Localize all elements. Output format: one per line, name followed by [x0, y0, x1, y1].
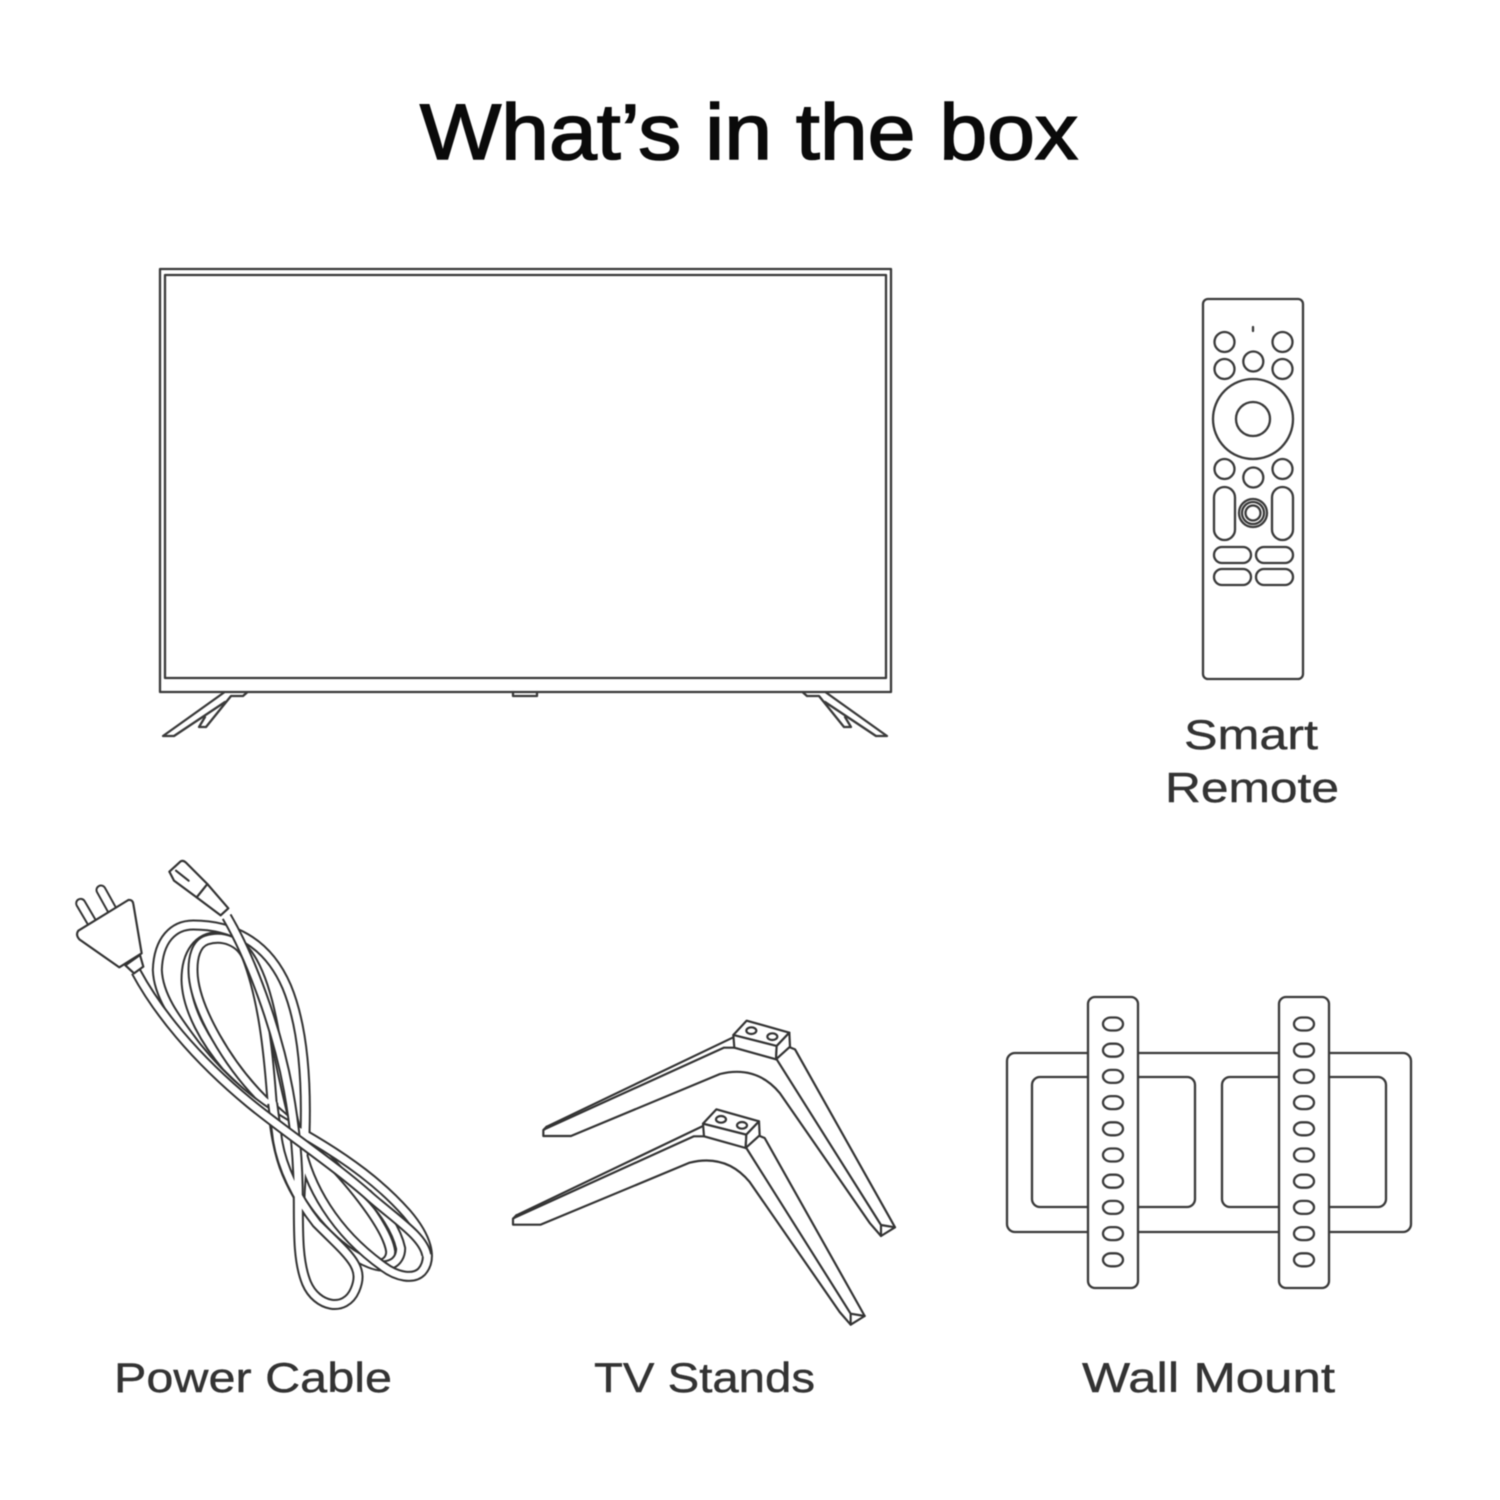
plug body [77, 900, 142, 967]
TV left foot [163, 692, 247, 736]
remote upper buttons [1214, 332, 1292, 379]
label: smart remote: Remote [1165, 764, 1339, 811]
connector notch [176, 871, 189, 881]
TV outer frame [160, 269, 891, 692]
remote indicator [1252, 327, 1254, 331]
rear stand [543, 1021, 895, 1236]
TV screen [165, 275, 886, 678]
connector body [197, 884, 228, 915]
remote body [1203, 299, 1303, 679]
mount left bracket [1088, 997, 1138, 1288]
label: TV stands: TV Stands [594, 1354, 815, 1401]
mount left window [1032, 1077, 1195, 1207]
label: power cable: Power Cable [114, 1354, 392, 1401]
icon: television [160, 269, 891, 736]
icon: smart remote [1203, 299, 1303, 679]
mount frame [1007, 1053, 1411, 1232]
title: What’s in the box [420, 87, 1078, 176]
TV centre sensor [513, 692, 537, 696]
mount right window [1222, 1077, 1386, 1207]
cable loops [136, 917, 427, 1305]
TV right foot [803, 692, 887, 736]
icon: TV stands [513, 1021, 895, 1325]
label: smart remote: Smart [1184, 711, 1318, 758]
mount right bracket [1279, 997, 1329, 1288]
icon: power cable [77, 861, 427, 1305]
connector head [169, 861, 207, 897]
front stand [513, 1109, 865, 1325]
plug prongs [81, 890, 114, 926]
icon: wall mount [1007, 997, 1411, 1288]
remote lower buttons [1214, 459, 1293, 585]
label: wall mount: Wall Mount [1082, 1354, 1335, 1401]
label: smart remote [1165, 711, 1339, 811]
plug neck [125, 955, 143, 973]
remote navigation ring [1213, 379, 1293, 459]
